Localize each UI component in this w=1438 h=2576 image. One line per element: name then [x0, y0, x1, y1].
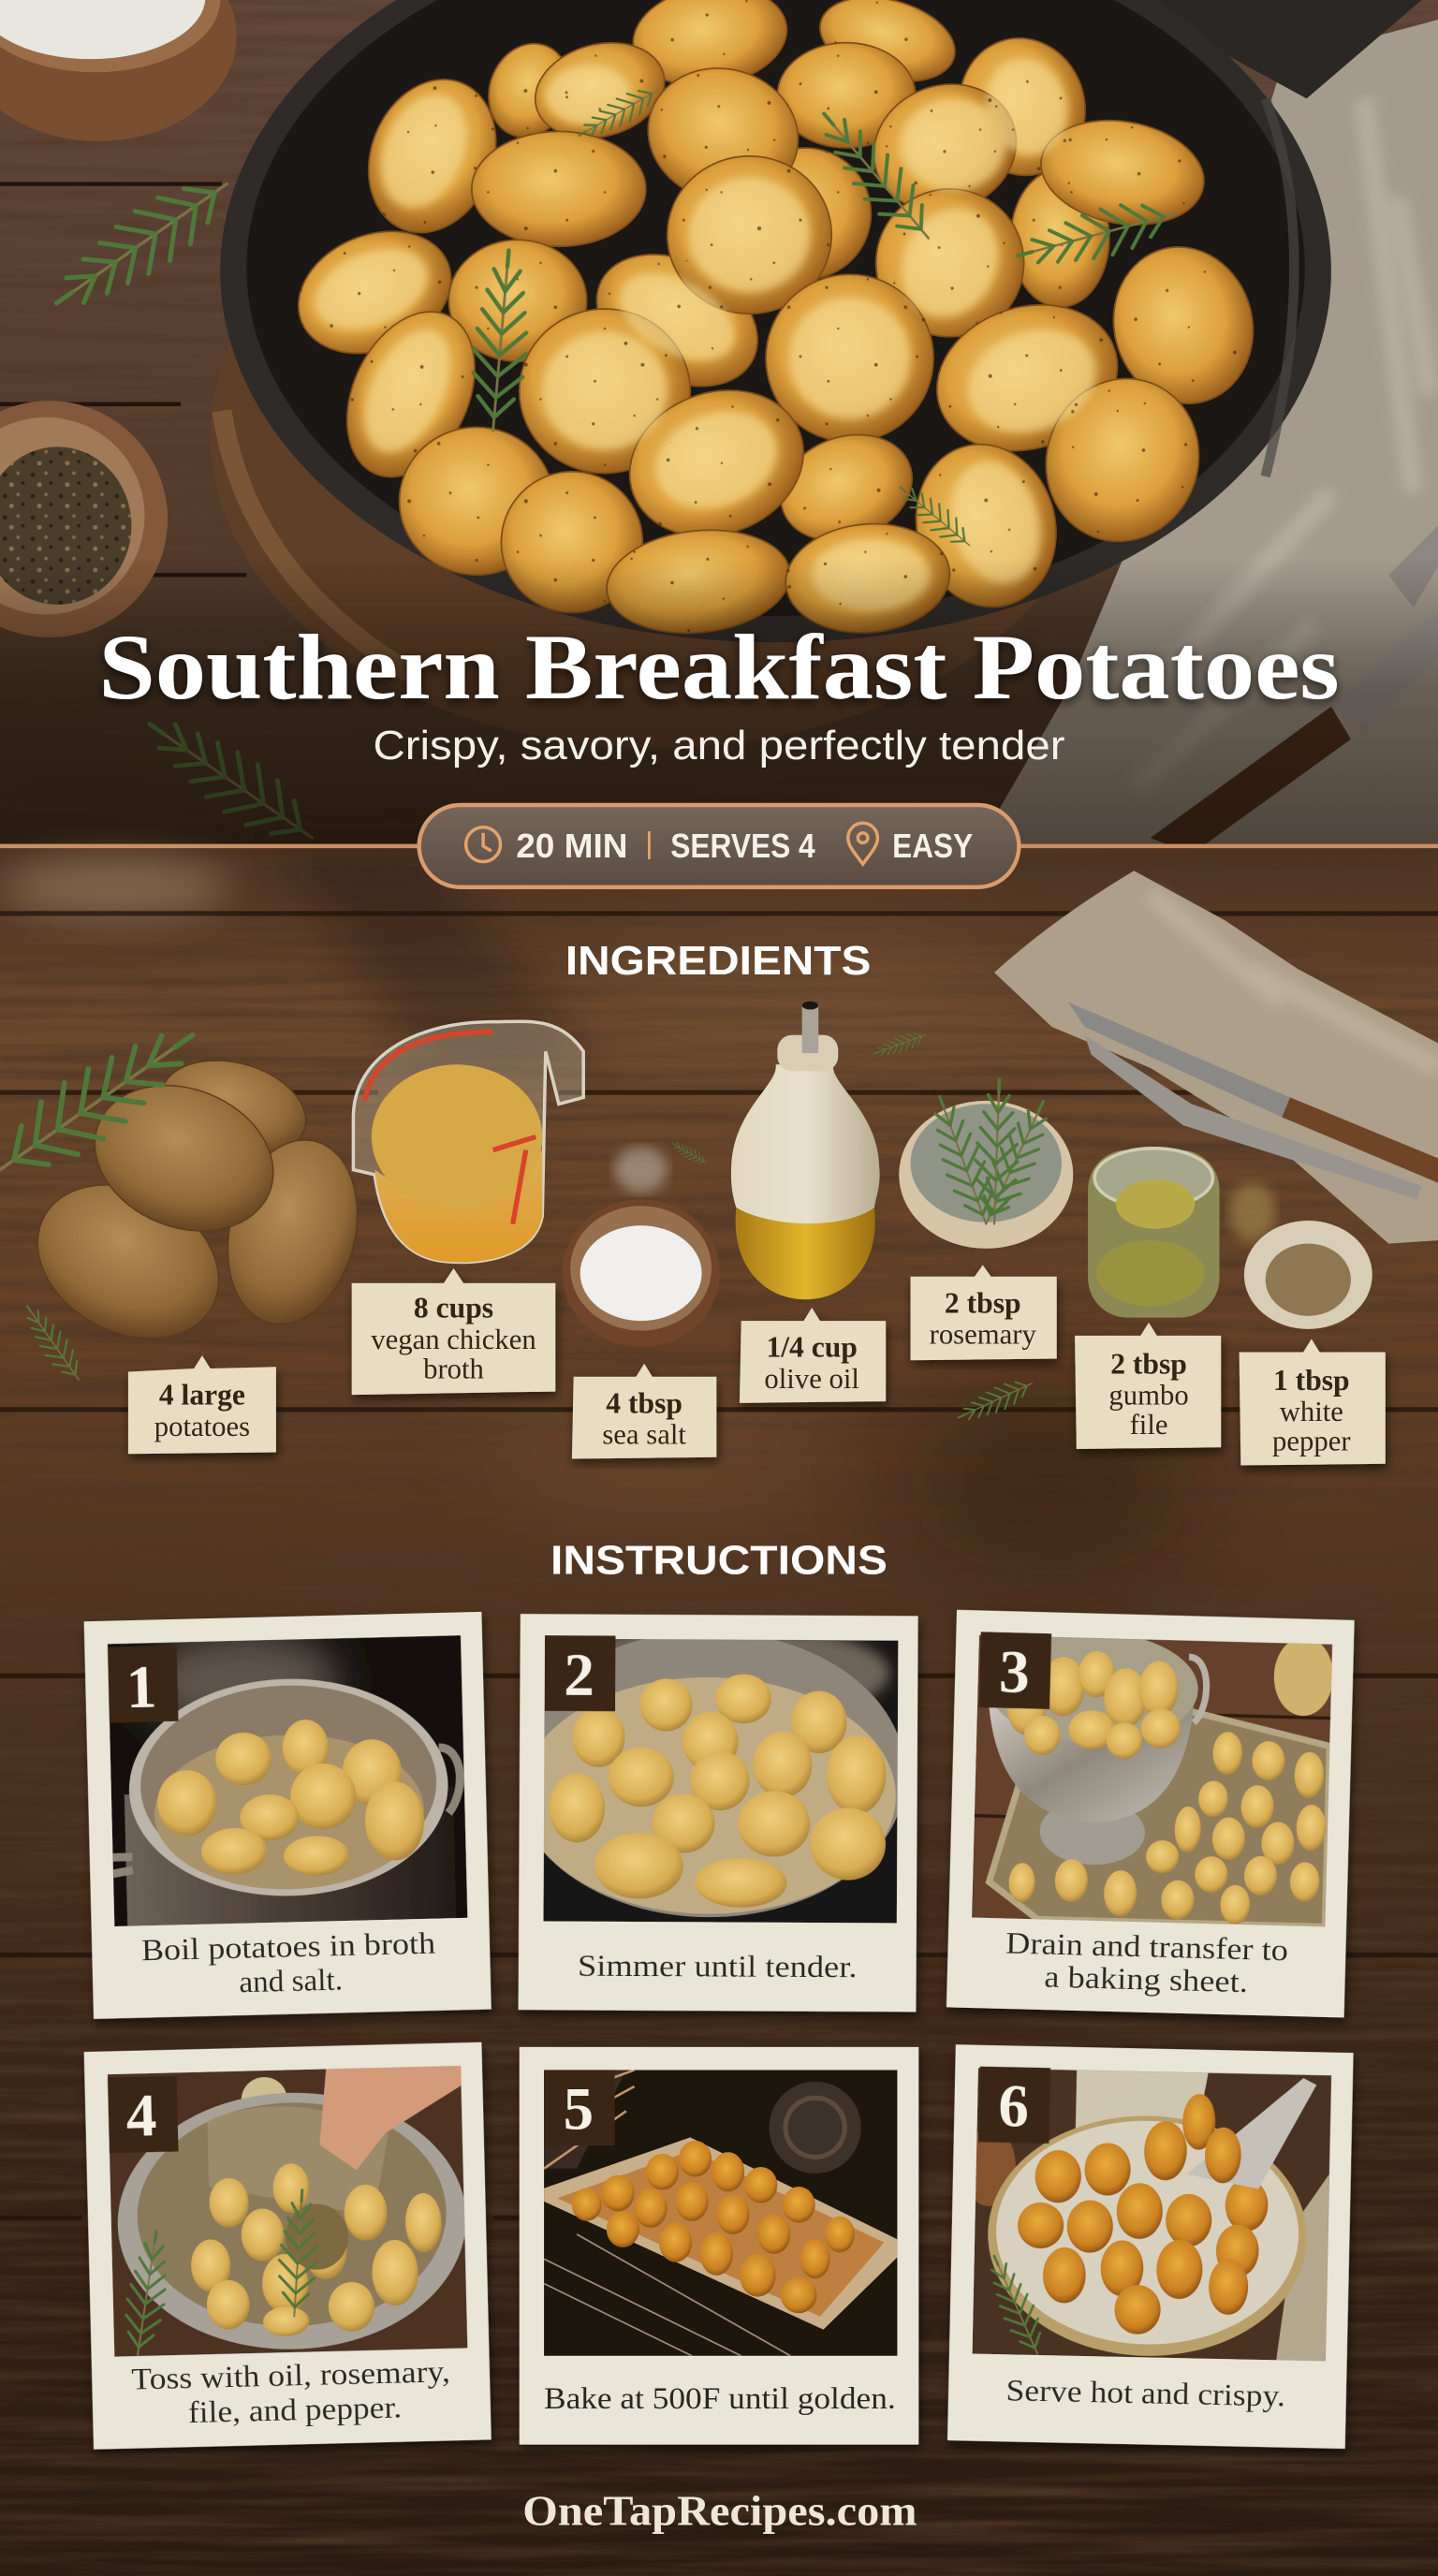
- step 4 caption: file, and pepper.: [188, 2391, 403, 2430]
- label: potatoes: potatoes: [154, 1411, 250, 1442]
- step card 3: [946, 1610, 1355, 2017]
- label: sea salt: 4 tbsp: [606, 1386, 682, 1419]
- label: gumbo file: [1075, 1323, 1221, 1449]
- label: sea salt: [572, 1364, 716, 1459]
- step card 1: [84, 1612, 492, 2019]
- recipe info bar: EASY: [892, 827, 973, 865]
- rosemary sprigs on table: [0, 1007, 1037, 1428]
- label: white pepper: white: [1280, 1396, 1343, 1427]
- roasted potatoes in skillet: [280, 0, 1270, 642]
- step 6 number badge: [978, 2067, 1050, 2144]
- footer website: OneTapRecipes.com: [522, 2487, 917, 2535]
- step card 4: [84, 2042, 492, 2450]
- step 1 number badge: [108, 1646, 179, 1722]
- label: potatoes: [128, 1355, 276, 1454]
- step 5 caption: Bake at 500F until golden.: [544, 2382, 896, 2416]
- step 5 number badge: [544, 2070, 615, 2145]
- step 2 number badge: [545, 1635, 616, 1711]
- fork and knife: [1151, 526, 1438, 855]
- ingredient: gumbo file jar: [1088, 1149, 1275, 1318]
- step card 5: [520, 2047, 918, 2445]
- step 3 caption: [1005, 1926, 1288, 2000]
- panel: hero photo of skillet potatoes: [0, 0, 1438, 861]
- icon: location pin: [848, 823, 877, 864]
- step 6 number badge: 6: [998, 2072, 1030, 2141]
- step card 6: [947, 2044, 1354, 2449]
- label: white pepper: 1 tbsp: [1273, 1364, 1350, 1397]
- heading: ingredients: INGREDIENTS: [565, 938, 871, 984]
- step 1 caption: and salt.: [239, 1964, 343, 1999]
- label: gumbo file: 2 tbsp: [1110, 1347, 1187, 1380]
- ingredient: white pepper bowl: [1244, 1221, 1372, 1329]
- step 5 photo: [544, 2070, 897, 2356]
- label: olive oil: olive oil: [764, 1363, 859, 1395]
- wooden board: [211, 124, 1105, 748]
- step 4 caption: [131, 2355, 451, 2431]
- label: potatoes: 4 large: [159, 1379, 245, 1412]
- step 2 number badge: 2: [564, 1641, 594, 1709]
- ingredient: rosemary bowl: [899, 1078, 1073, 1249]
- step 2 caption: Simmer until tender.: [578, 1950, 858, 1984]
- salt bowl: [0, 0, 237, 141]
- recipe info bar: [0, 805, 1438, 887]
- label: broth: 8 cups: [414, 1292, 493, 1325]
- label: broth: broth: [423, 1354, 484, 1385]
- step card 2: [510, 1614, 918, 2012]
- step 1 caption: [141, 1927, 436, 2002]
- title: Southern Breakfast Potatoes: [98, 615, 1340, 719]
- step 4 number badge: [108, 2076, 179, 2153]
- step 4 number badge: 4: [125, 2083, 157, 2150]
- label: rosemary: 2 tbsp: [945, 1286, 1021, 1319]
- panel: wooden table lower background: [0, 846, 1438, 2576]
- ingredient: sea salt bowl: [562, 1147, 720, 1347]
- skillet: [220, 0, 1421, 642]
- label: olive oil: 1/4 cup: [766, 1331, 858, 1364]
- step 1 number badge: 1: [125, 1653, 157, 1721]
- step 3 caption: a baking sheet.: [1044, 1961, 1248, 1999]
- step 3 number badge: 3: [998, 1638, 1031, 1706]
- label: gumbo file: file: [1130, 1409, 1168, 1441]
- linen cloth: [977, 20, 1438, 846]
- rosemary sprigs on table: [39, 159, 329, 861]
- step 3 photo: [972, 1634, 1333, 1926]
- step 1 photo: [107, 1634, 468, 1926]
- label: rosemary: [911, 1265, 1057, 1360]
- label: rosemary: rosemary: [930, 1319, 1037, 1351]
- step 3 caption: Drain and transfer to: [1005, 1926, 1288, 1968]
- icon: clock: [466, 827, 501, 862]
- label: sea salt: sea salt: [602, 1419, 686, 1451]
- step 2 photo: [543, 1638, 899, 1923]
- step 6 caption: Serve hot and crispy.: [1005, 2375, 1285, 2414]
- heading: instructions: INSTRUCTIONS: [550, 1537, 888, 1583]
- step 4 photo: [107, 2065, 468, 2357]
- ingredient: potatoes: [11, 1046, 375, 1368]
- step 5 number badge: 5: [564, 2076, 594, 2144]
- subtitle: Crispy, savory, and perfectly tender: [373, 723, 1065, 768]
- label: white pepper: [1240, 1339, 1386, 1466]
- label: gumbo file: gumbo: [1108, 1380, 1189, 1412]
- herb garnish in skillet: [467, 79, 1181, 555]
- step 1 caption: Boil potatoes in broth: [141, 1927, 436, 1968]
- step 6 photo: [972, 2068, 1331, 2362]
- step 3 number badge: [979, 1632, 1051, 1709]
- ingredient: measuring cup with broth: [353, 1021, 583, 1262]
- label: broth: [352, 1268, 555, 1395]
- label: white pepper: pepper: [1272, 1426, 1351, 1457]
- recipe info bar: SERVES 4: [670, 827, 815, 865]
- recipe info bar: 20 MIN: [516, 827, 628, 865]
- pepper bowl: [0, 401, 168, 637]
- label: broth: vegan chicken: [371, 1324, 536, 1355]
- label: olive oil: [740, 1308, 886, 1403]
- ingredient: olive oil bottle: [731, 1002, 880, 1299]
- step 4 caption: Toss with oil, rosemary,: [131, 2355, 450, 2397]
- napkin with fork and knife: [994, 871, 1438, 1244]
